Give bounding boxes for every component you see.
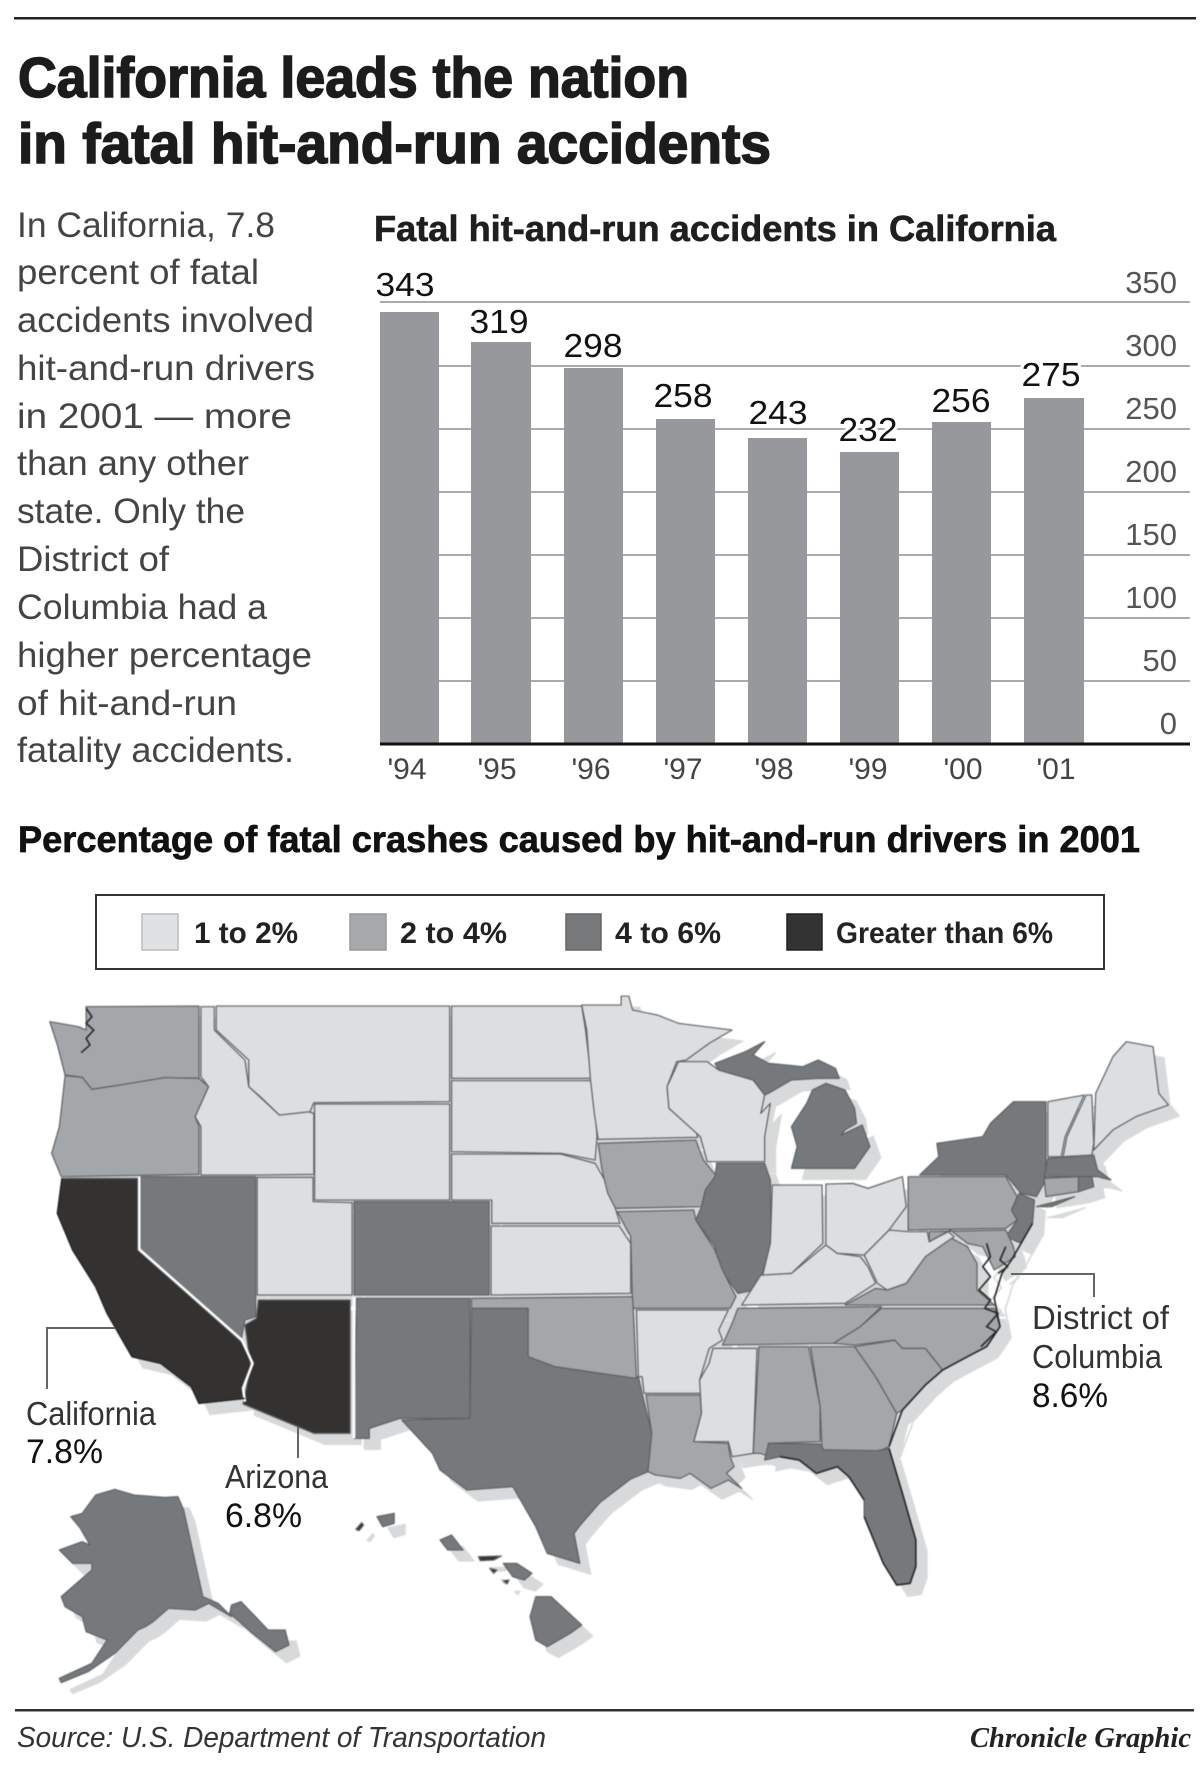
eastern states <box>471 996 1168 1585</box>
map of the United States <box>50 996 1168 1683</box>
text block: intro: of hit-and-run <box>17 684 237 723</box>
x axis labels: '95 <box>477 753 517 786</box>
text block: intro: hit-and-run drivers <box>17 349 315 388</box>
text block: intro: fatality accidents. <box>17 731 294 770</box>
Hawaii <box>356 1513 582 1647</box>
callout: California <box>26 1328 157 1471</box>
bar value labels: 258 <box>654 377 712 414</box>
callout: California: California <box>26 1395 157 1432</box>
title <box>18 46 771 176</box>
callout: Arizona: Arizona <box>225 1458 329 1495</box>
callout: Arizona: 6.8% <box>225 1497 302 1535</box>
legend <box>96 895 1104 969</box>
Texas <box>402 1308 652 1563</box>
y axis labels: 100 <box>1125 580 1177 615</box>
callout: District of Columbia <box>1011 1274 1170 1415</box>
x axis labels: '01 <box>1036 753 1076 786</box>
x axis labels: '96 <box>571 753 611 786</box>
callout: Arizona <box>225 1427 329 1535</box>
x axis labels: '97 <box>663 753 703 786</box>
x axis labels <box>387 753 1076 786</box>
callout: District of Columbia: 8.6% <box>1032 1377 1108 1415</box>
California <box>57 1178 253 1403</box>
y axis labels: 200 <box>1125 454 1177 489</box>
y axis labels: 350 <box>1125 265 1177 300</box>
legend: 1 to 2% <box>194 917 298 950</box>
chart heading: Fatal hit-and-run accidents in California <box>374 208 1057 249</box>
title: in fatal hit-and-run accidents <box>18 112 771 176</box>
title: California leads the nation <box>18 46 689 110</box>
text block: intro: District of <box>17 540 169 579</box>
text block: intro: in 2001 — more <box>17 397 292 436</box>
legend: 4 to 6% <box>615 917 721 950</box>
callout: District of Columbia: Columbia <box>1032 1338 1163 1375</box>
map heading: Percentage of fatal crashes caused by hit-and-run drivers in 2001 <box>18 819 1140 860</box>
text block: intro: than any other <box>17 444 249 483</box>
bars <box>380 312 1084 744</box>
y axis labels: 50 <box>1143 643 1177 678</box>
text block: intro: Columbia had a <box>17 588 268 627</box>
y axis labels: 150 <box>1125 517 1177 552</box>
Arizona <box>243 1300 350 1433</box>
bar value labels: 298 <box>564 327 622 364</box>
Alaska <box>59 1489 289 1683</box>
bar value labels <box>376 266 1080 448</box>
bar value labels: 319 <box>470 303 528 340</box>
bar chart: fatal accidents by year <box>376 265 1190 786</box>
western states <box>50 1006 652 1563</box>
bar value labels: 243 <box>748 394 808 431</box>
y axis labels: 0 <box>1160 706 1177 741</box>
x axis labels: '00 <box>943 753 983 786</box>
callout: California: 7.8% <box>26 1433 103 1471</box>
source line: Source: U.S. Department of Transportation <box>17 1722 546 1754</box>
callout: District of Columbia: District of <box>1032 1299 1170 1336</box>
text block: intro: state. Only the <box>17 492 245 531</box>
text block: intro <box>17 206 315 770</box>
Nevada <box>141 1177 256 1340</box>
bar value labels: 343 <box>376 266 434 303</box>
text block: intro: accidents involved <box>17 301 314 340</box>
bar value labels: 232 <box>838 411 898 448</box>
bar value labels: 275 <box>1022 356 1080 393</box>
legend: Greater than 6% <box>836 917 1053 950</box>
y axis labels: 250 <box>1125 391 1177 426</box>
legend: 2 to 4% <box>400 917 507 950</box>
x axis labels: '99 <box>848 753 888 786</box>
bar value labels: 256 <box>932 382 990 419</box>
text block: intro: higher percentage <box>17 636 312 675</box>
x axis labels: '94 <box>387 753 427 786</box>
text block: intro: percent of fatal <box>17 253 259 292</box>
credit: Chronicle Graphic <box>970 1723 1192 1754</box>
x axis labels: '98 <box>754 753 794 786</box>
y axis labels <box>1125 265 1177 741</box>
text block: intro: In California, 7.8 <box>17 206 275 245</box>
y axis labels: 300 <box>1125 328 1177 363</box>
